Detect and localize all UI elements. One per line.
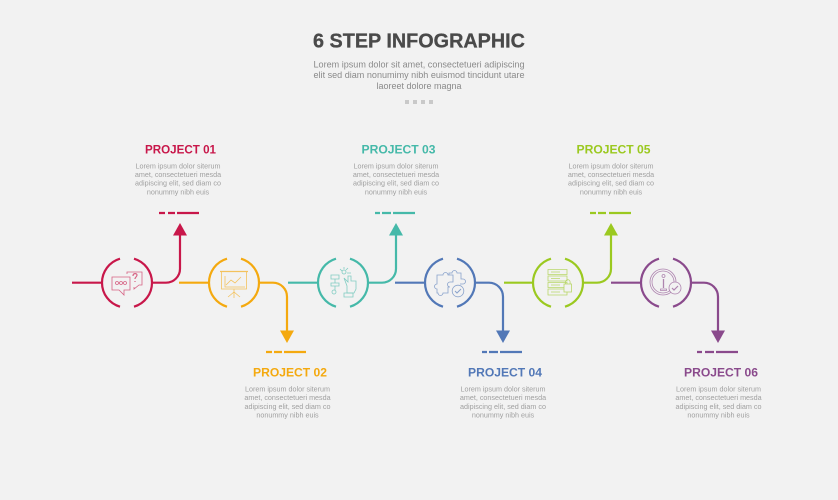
text block: project 04: adipiscing elit, sed diam co: [460, 402, 546, 411]
text block: project 04: [460, 384, 546, 420]
text block: project 05: amet, consectetueri mesda: [568, 170, 654, 179]
ring: project 02: [179, 259, 259, 307]
text block: project 01: amet, consectetueri mesda: [135, 170, 221, 179]
icon: info badge with check: [650, 269, 681, 295]
dashes: project 06: [697, 351, 738, 353]
heading: project 03: PROJECT 03: [362, 142, 436, 156]
step 1: project 01: [72, 142, 221, 307]
arrow: project 01: [152, 223, 187, 283]
heading: project 02: PROJECT 02: [253, 366, 327, 380]
text block: project 05: Lorem ipsum dolor siterum: [568, 162, 654, 170]
step 6: project 06: [611, 259, 762, 420]
heading: project 04: PROJECT 04: [468, 366, 542, 380]
text block: project 02: amet, consectetueri mesda: [244, 393, 331, 402]
step 3: project 03: [288, 142, 439, 307]
text block: project 02: Lorem ipsum dolor siterum: [245, 384, 330, 394]
step 2: project 02: [179, 259, 331, 420]
text block: project 01: [135, 162, 221, 196]
text block: project 02: nonummy nibh euis: [256, 410, 319, 420]
text block: project 06: amet, consectetueri mesda: [675, 393, 762, 402]
dashes: project 05: [590, 212, 631, 214]
text block: project 03: nonummy nibh euis: [365, 188, 428, 196]
heading: project 05: PROJECT 05: [576, 142, 651, 156]
arrow: project 06: [691, 283, 725, 343]
step 4: project 04: [395, 259, 546, 420]
title: 6 STEP INFOGRAPHIC: [313, 30, 525, 52]
title pagination dots: [405, 100, 433, 104]
arrow: project 04: [475, 283, 510, 343]
text block: project 04: amet, consectetueri mesda: [460, 393, 546, 402]
text block: project 03: [353, 162, 439, 196]
text block: project 01: adipiscing elit, sed diam co: [135, 178, 221, 188]
arrow: project 03: [368, 223, 403, 283]
heading: project 06: PROJECT 06: [684, 366, 758, 380]
text block: project 03: adipiscing elit, sed diam co: [353, 178, 439, 188]
dashes: project 02: [266, 351, 306, 353]
subtitle text: [314, 60, 524, 92]
subtitle text: Lorem ipsum dolor sit amet, consectetueri adipiscing: [314, 60, 524, 70]
dashes: project 01: [159, 212, 199, 214]
text block: project 05: nonummy nibh euis: [580, 188, 643, 196]
text block: project 04: Lorem ipsum dolor siterum: [460, 384, 546, 394]
arrow: project 02: [259, 283, 294, 343]
ring: project 05: [504, 259, 583, 307]
dashes: project 04: [482, 351, 522, 353]
text block: project 03: Lorem ipsum dolor siterum: [353, 162, 439, 170]
text block: project 02: adipiscing elit, sed diam co: [245, 402, 330, 411]
ring: project 04: [395, 259, 475, 307]
text block: project 06: Lorem ipsum dolor siterum: [676, 384, 761, 394]
subtitle text: laoreet dolore magna: [376, 81, 462, 92]
ring: project 03: [288, 259, 368, 307]
text block: project 04: nonummy nibh euis: [472, 410, 535, 420]
text block: project 06: [675, 384, 762, 420]
icon: speech bubbles with question mark: [112, 272, 142, 295]
subtitle text: elit sed diam nonumimy nibh euismod tincidunt utare: [314, 70, 524, 81]
text block: project 05: [568, 162, 654, 196]
icon: presentation board: [220, 272, 248, 298]
text block: project 01: nonummy nibh euis: [147, 188, 210, 196]
ring: project 06: [611, 259, 691, 307]
text block: project 05: adipiscing elit, sed diam co: [568, 178, 654, 188]
icon: hand touching diagram: [331, 267, 356, 297]
text block: project 06: nonummy nibh euis: [687, 410, 750, 420]
step 5: project 05: [504, 142, 654, 307]
text block: project 01: Lorem ipsum dolor siterum: [135, 162, 221, 170]
text block: project 06: adipiscing elit, sed diam co: [676, 402, 761, 411]
arrow: project 05: [583, 223, 618, 283]
icon: server document with lock: [548, 270, 572, 295]
dashes: project 03: [375, 212, 415, 214]
text block: project 02: [244, 384, 331, 420]
text block: project 03: amet, consectetueri mesda: [353, 170, 439, 179]
ring: project 01: [72, 259, 152, 307]
icon: puzzle pieces with check: [434, 270, 466, 297]
heading: project 01: PROJECT 01: [145, 142, 216, 156]
